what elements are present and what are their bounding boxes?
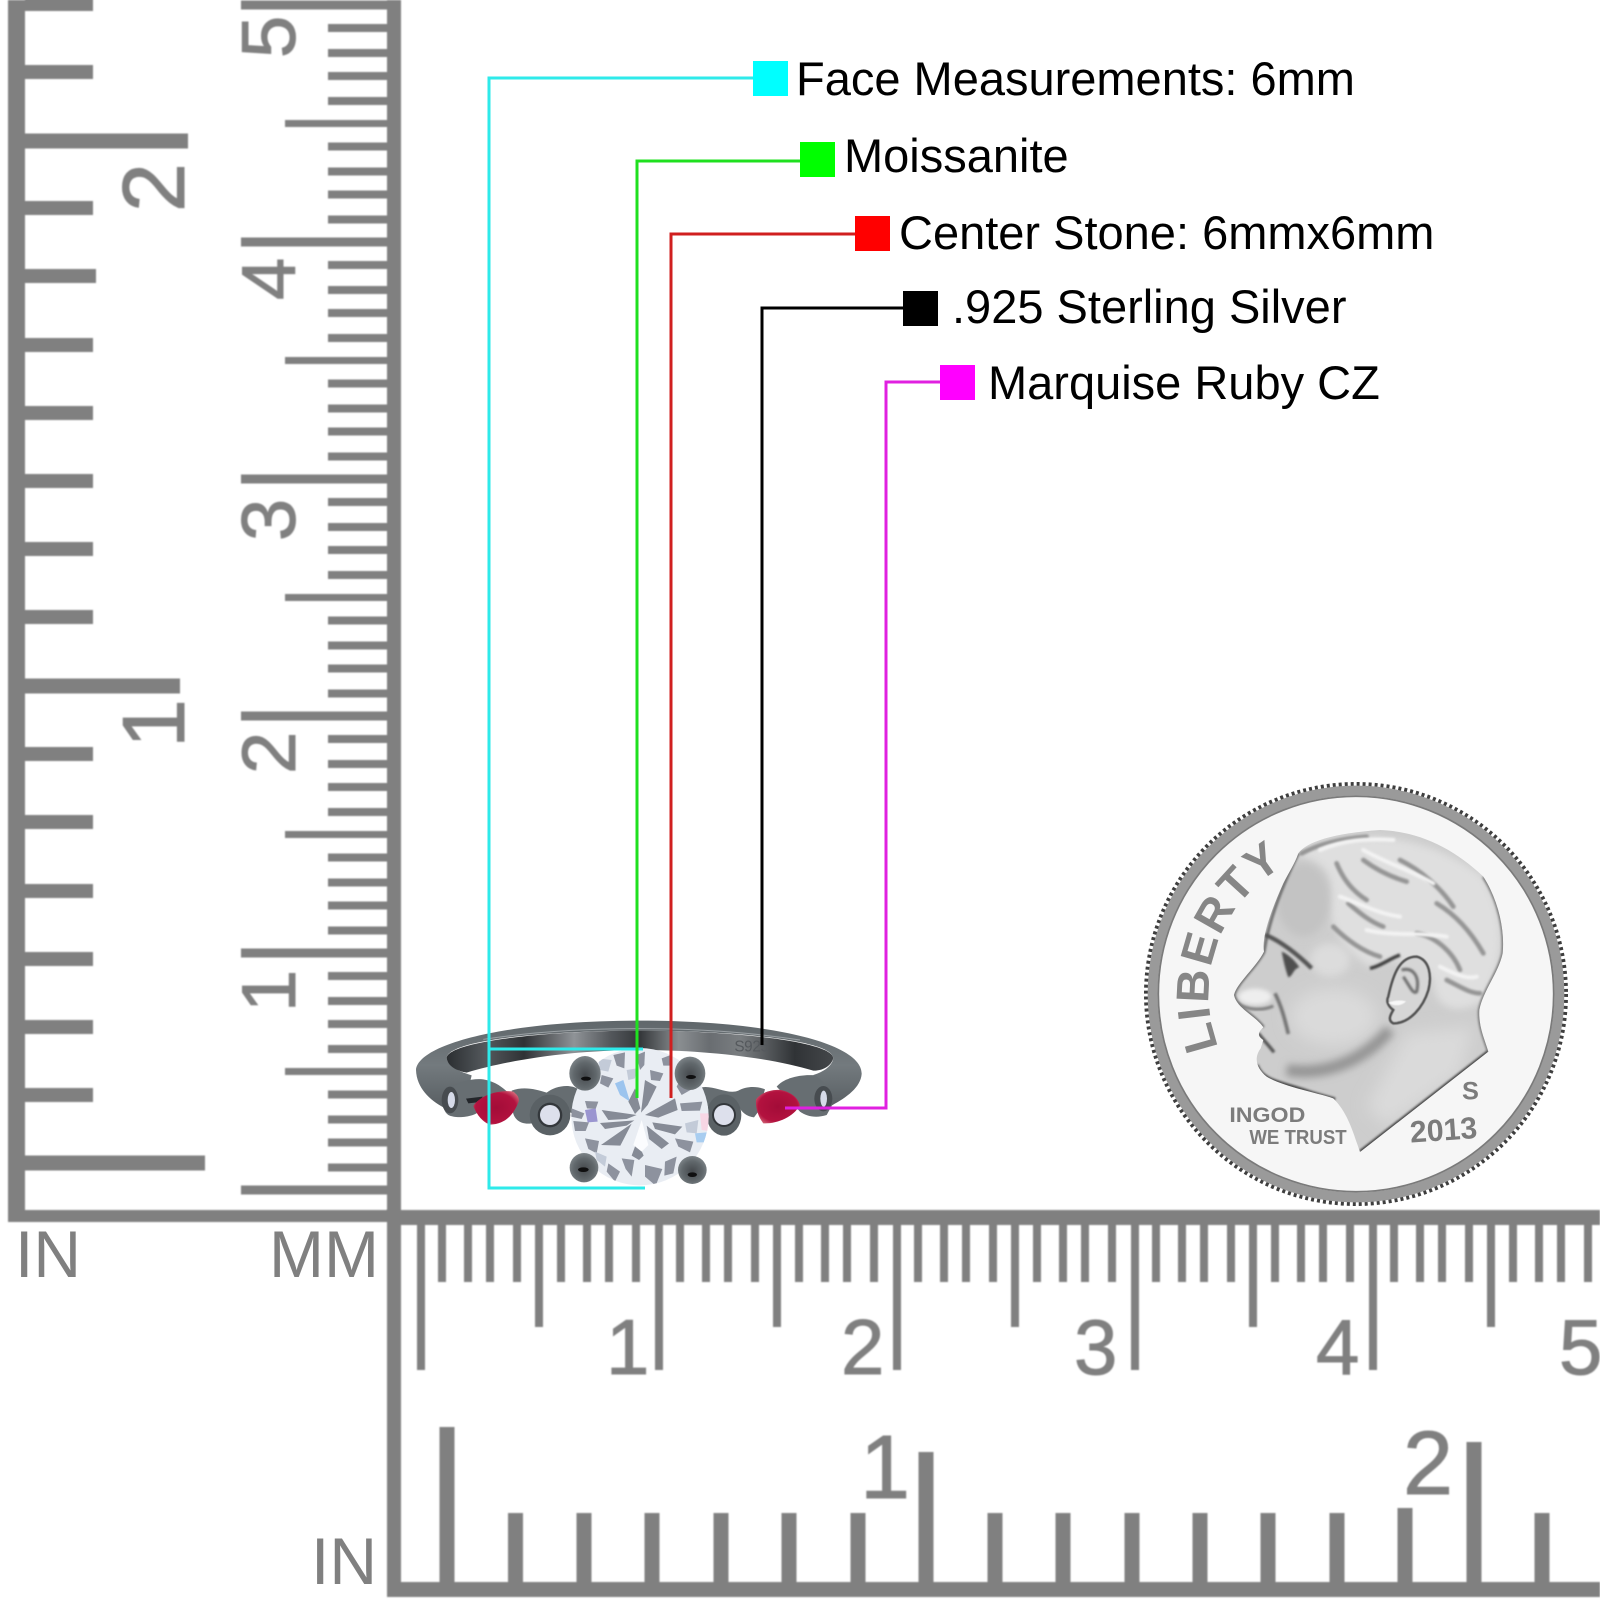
left end stone [448, 1092, 455, 1108]
left ruler cm numbers [227, 16, 312, 1012]
millimetre ticks on left ruler [328, 28, 387, 1168]
crown facets [571, 1052, 702, 1186]
left ruler cm numbers: 4 [227, 258, 312, 300]
stone base [571, 1048, 709, 1185]
prong top right [675, 1057, 705, 1090]
stone facets [571, 1052, 709, 1186]
black sterling silver line [762, 308, 903, 1045]
mint mark S: S [1462, 1077, 1479, 1105]
left shoulder slit [466, 1097, 483, 1103]
left ruler inch numbers: 2 [104, 163, 203, 212]
centimetre ticks on left ruler [241, 5, 387, 1190]
nose highlight [1238, 989, 1272, 1005]
ear lobe highlight [1388, 1000, 1406, 1005]
bottom ruler cm numbers: 2 [841, 1303, 884, 1391]
bottom ruler inch numbers [860, 1414, 1453, 1518]
LIBERTY lettering: LIBERTY [1176, 840, 1274, 1054]
left ruler inch numbers: 1 [104, 699, 203, 748]
hair dark strands [1302, 837, 1483, 993]
right round bezel [707, 1094, 741, 1136]
band inner highlight [483, 1029, 800, 1040]
cheek highlight [1294, 991, 1372, 1042]
coin rim [1153, 791, 1559, 1197]
bottom ruler cm numbers: 4 [1316, 1303, 1359, 1391]
dime coin [1144, 782, 1568, 1206]
date 2013: 2013 [1409, 1111, 1478, 1150]
ear inner fold [1402, 969, 1418, 992]
unit labels: IN [311, 1524, 377, 1598]
jaw line [1257, 1065, 1335, 1099]
red center stone line [671, 234, 855, 1098]
jaw shadow [1287, 1030, 1390, 1071]
five millimetre ticks on bottom ruler [539, 1225, 1491, 1327]
unit labels: MM [269, 1217, 379, 1291]
inch ticks on bottom ruler [447, 1427, 1542, 1582]
motto: in god we trust [1229, 1103, 1347, 1149]
legend item: center stone: Center Stone: 6mmx6mm [899, 206, 1434, 259]
ring [416, 1021, 862, 1186]
bottom ruler cm numbers: 1 [606, 1303, 649, 1391]
legend item: moissanite: Moissanite [844, 129, 1069, 182]
sky facet right [695, 1132, 707, 1142]
left marquise ruby [473, 1091, 519, 1125]
back of head edge [1479, 877, 1503, 1052]
rim inner line [1158, 796, 1554, 1192]
left end bezel [442, 1087, 458, 1113]
bottom ruler frame [387, 1210, 1600, 1597]
unit labels: IN [15, 1217, 81, 1291]
unit labels [15, 1217, 379, 1598]
star grey facets [600, 1080, 682, 1160]
left ruler inch numbers [104, 163, 203, 748]
temple highlight [1312, 944, 1348, 976]
millimetre ticks on bottom ruler [442, 1225, 1588, 1282]
outline darkening [1234, 853, 1298, 1027]
left ruler cm numbers: 3 [227, 499, 312, 541]
left ruler frame [8, 0, 401, 1222]
S925 stamp: S925 [734, 1039, 769, 1056]
ring band [416, 1021, 862, 1110]
legend item: marquise ruby: Marquise Ruby CZ [988, 356, 1380, 409]
left bezel seat [538, 1103, 562, 1127]
hair mass [1300, 837, 1501, 1009]
leader lines [489, 78, 940, 1188]
left shoulder [443, 1079, 510, 1117]
cyan face measurement bracket [489, 78, 753, 1188]
long inch ticks on left ruler [25, 141, 205, 1163]
magenta marquise line [785, 382, 940, 1108]
nostril [1237, 1003, 1273, 1009]
left ruler cm numbers: 2 [227, 732, 312, 774]
left knobs [512, 1086, 578, 1124]
neck tone [1374, 1031, 1466, 1118]
legend item: sterling silver: .925 Sterling Silver [952, 280, 1346, 333]
head silhouette [1234, 830, 1503, 1152]
legend [753, 52, 1434, 409]
inch ticks on left ruler [25, 4, 96, 1095]
left vertical ruler [8, 0, 401, 1222]
green moissanite line [637, 161, 800, 1098]
eye [1282, 952, 1299, 977]
bottom ruler inch numbers: 2 [1403, 1414, 1453, 1514]
right shoulder [777, 1075, 832, 1117]
legend item: face measurements: Face Measurements: 6mm [796, 52, 1355, 105]
reeded edge [1146, 784, 1566, 1204]
bottom horizontal ruler [387, 1210, 1600, 1597]
chest edge [1360, 1052, 1488, 1152]
motto: in god we trust: WE TRUST [1249, 1126, 1347, 1149]
portrait [1234, 830, 1503, 1152]
right end stone [820, 1091, 827, 1107]
right bezel seat [712, 1103, 736, 1127]
mouth [1258, 1033, 1274, 1052]
lavender facet [585, 1108, 598, 1122]
portrait shading [1234, 837, 1503, 1152]
star center highlight [633, 1120, 648, 1152]
right marquise ruby [756, 1090, 800, 1123]
left round bezel [530, 1095, 570, 1135]
prong bottom right [678, 1156, 707, 1184]
bottom ruler inch numbers: 1 [860, 1418, 910, 1518]
bottom ruler cm numbers: 3 [1074, 1303, 1117, 1391]
left ruler cm numbers: 5 [227, 16, 312, 58]
right knobs [702, 1087, 765, 1117]
five millimetre ticks on left ruler [285, 124, 387, 1072]
light crown facets [595, 1058, 698, 1167]
prong bottom left [570, 1153, 598, 1182]
right end bezel [814, 1086, 832, 1111]
prong top left [569, 1056, 601, 1091]
left ruler cm numbers: 1 [227, 970, 312, 1012]
hair light strands [1320, 839, 1477, 978]
motto: in god we trust: INGOD [1229, 1103, 1305, 1127]
ear [1387, 957, 1430, 1023]
brow [1265, 935, 1312, 968]
hair shadow near ear [1370, 955, 1400, 968]
right accent stone [714, 1105, 734, 1125]
forehead tone [1281, 868, 1331, 932]
center stone [571, 1048, 709, 1186]
bottom ruler cm numbers [606, 1303, 1600, 1391]
nose fold [1275, 993, 1288, 1034]
left accent stone [540, 1105, 560, 1125]
blue facet [615, 1080, 630, 1102]
pink facet [700, 1113, 709, 1131]
inside of band [447, 1031, 833, 1073]
centimetre ticks on bottom ruler [421, 1225, 1373, 1370]
